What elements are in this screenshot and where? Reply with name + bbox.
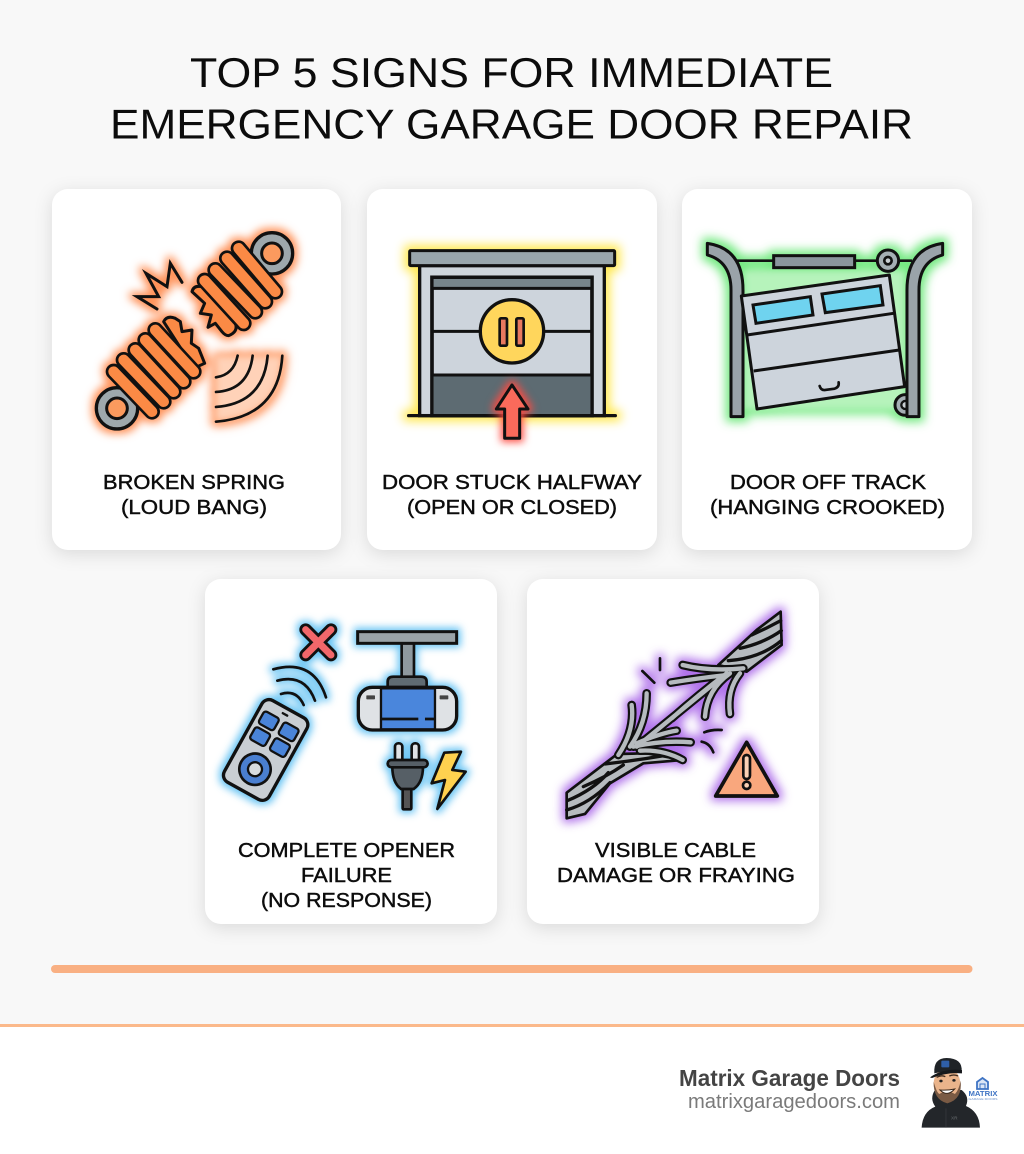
icon: stuck door xyxy=(409,251,615,438)
title: TOP 5 SIGNS FOR IMMEDIATE xyxy=(190,49,833,96)
label: complete opener failure: FAILURE xyxy=(301,865,392,887)
icon: frayed cable xyxy=(567,612,782,818)
brand name: Matrix Garage Doors xyxy=(679,1065,900,1091)
label: complete opener failure: COMPLETE OPENER xyxy=(238,840,455,862)
logo: Matrix xyxy=(968,1078,998,1101)
label: cable damage xyxy=(557,840,795,887)
logo: Matrix: GARAGE DOORS xyxy=(968,1097,998,1101)
label: complete opener failure xyxy=(238,840,455,912)
orange divider bar xyxy=(51,965,972,973)
icon: remote, opener and plug xyxy=(221,630,466,809)
panel: complete opener failure xyxy=(205,579,497,924)
mascot portrait: XR xyxy=(951,1115,958,1120)
icon: door off track xyxy=(707,243,943,417)
website: matrixgaragedoors.com xyxy=(688,1091,900,1113)
label: broken spring: BROKEN SPRING xyxy=(103,472,285,494)
label: cable damage: DAMAGE OR FRAYING xyxy=(557,865,795,887)
label: broken spring: (LOUD BANG) xyxy=(121,497,267,519)
panel: cable damage xyxy=(527,579,819,924)
label: door off track: (HANGING CROOKED) xyxy=(710,497,945,519)
label: door stuck halfway: DOOR STUCK HALFWAY xyxy=(382,472,642,494)
label: door off track: DOOR OFF TRACK xyxy=(730,472,927,494)
title: EMERGENCY GARAGE DOOR REPAIR xyxy=(110,100,913,148)
label: door off track xyxy=(710,472,945,519)
title xyxy=(110,49,913,148)
label: cable damage: VISIBLE CABLE xyxy=(595,840,756,862)
label: door stuck halfway: (OPEN OR CLOSED) xyxy=(407,497,617,519)
panel: door stuck halfway xyxy=(367,189,657,550)
icon: warning triangle xyxy=(716,742,777,796)
icon: broken spring xyxy=(96,233,293,429)
logo: Matrix: MATRIX xyxy=(968,1091,998,1098)
footer xyxy=(0,1024,1024,1154)
panel: broken spring xyxy=(52,189,341,550)
icon: red up arrow xyxy=(496,385,528,438)
mascot portrait xyxy=(922,1058,980,1128)
label: complete opener failure: (NO RESPONSE) xyxy=(261,890,432,912)
panel: door off track xyxy=(682,189,972,550)
label: broken spring xyxy=(103,472,285,519)
label: door stuck halfway xyxy=(382,472,642,519)
